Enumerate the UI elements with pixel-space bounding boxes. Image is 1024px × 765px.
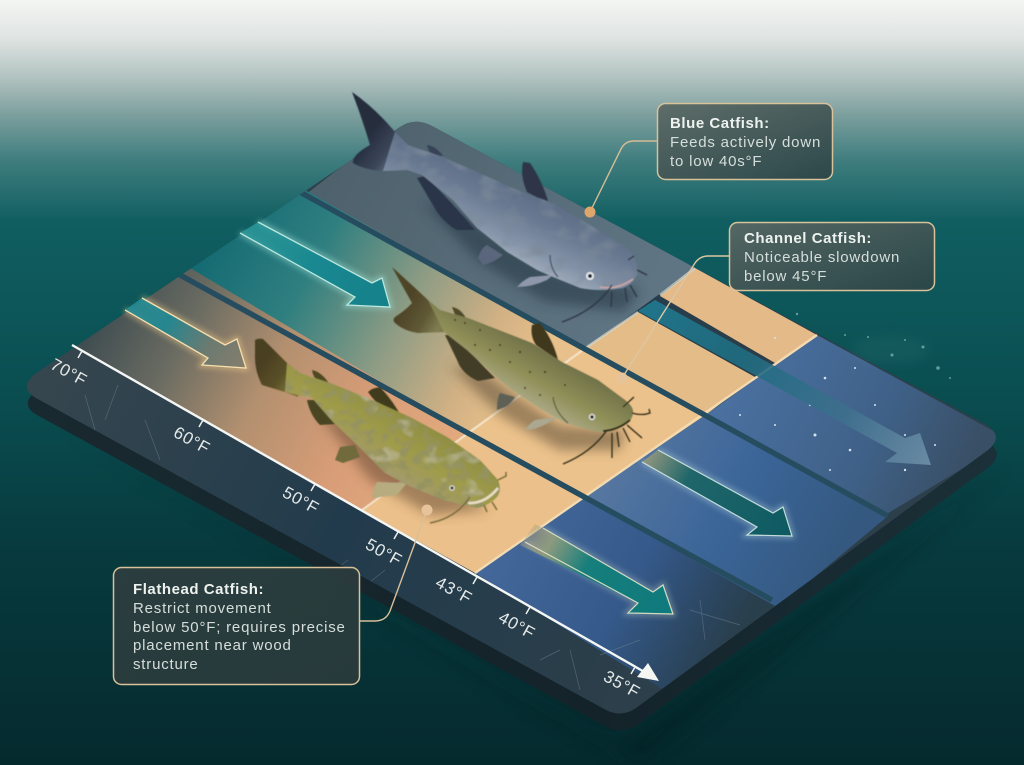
callout: flathead catfish: placement near wood — [133, 637, 292, 654]
axis temperature labels: 43°F — [432, 573, 475, 608]
temperature axis — [47, 345, 659, 702]
arrow: first lane cold arrow — [520, 524, 673, 614]
fish: flathead catfish — [255, 339, 506, 523]
callout: channel catfish: Channel Catfish: — [744, 230, 872, 247]
callout: flathead catfish: below 50°F; requires precise — [133, 619, 346, 636]
arrow: channel lane warm arrow — [240, 222, 390, 307]
axis temperature labels: 35°F — [600, 667, 643, 702]
boundary lines between temperature zones — [362, 335, 817, 573]
lane divider lines — [180, 191, 888, 600]
callout: flathead catfish: Restrict movement — [133, 600, 272, 617]
scratches and sparkles — [85, 385, 740, 690]
band: blue catfish lane — [305, 105, 1010, 515]
axis temperature labels: 50°F — [362, 535, 405, 570]
fish: blue catfish — [352, 92, 647, 322]
callout: blue catfish: Feeds actively down — [670, 134, 821, 151]
drifting particles — [796, 313, 951, 379]
callout: flathead catfish: Flathead Catfish: — [133, 581, 264, 598]
board top surface — [27, 122, 996, 714]
arrow: second lane cold arrow — [642, 450, 792, 536]
axis temperature labels — [47, 355, 643, 702]
axis temperature labels: 60°F — [170, 423, 213, 458]
callout: blue catfish: Blue Catfish: — [670, 115, 770, 132]
callout: blue catfish — [584, 104, 832, 218]
axis temperature labels: 70°F — [47, 355, 90, 390]
callout: blue catfish: to low 40s°F — [670, 153, 762, 170]
callout: channel catfish: below 45°F — [744, 268, 827, 285]
callout: flathead catfish — [114, 504, 432, 684]
arrow: flathead lane warm arrow — [125, 298, 246, 368]
axis ticks — [78, 351, 635, 674]
board side edge — [28, 139, 997, 731]
band: channel catfish lane — [170, 190, 888, 610]
board shadow — [40, 415, 1010, 765]
callout: flathead catfish: structure — [133, 656, 199, 673]
callout: channel catfish — [616, 222, 934, 384]
arrow: third lane fading arrow — [638, 300, 931, 465]
band: flathead catfish lane — [60, 262, 800, 700]
axis temperature labels: 50°F — [279, 483, 322, 518]
axis temperature labels: 40°F — [495, 608, 538, 643]
fish: channel catfish — [392, 267, 650, 464]
callout: channel catfish: Noticeable slowdown — [744, 249, 900, 266]
